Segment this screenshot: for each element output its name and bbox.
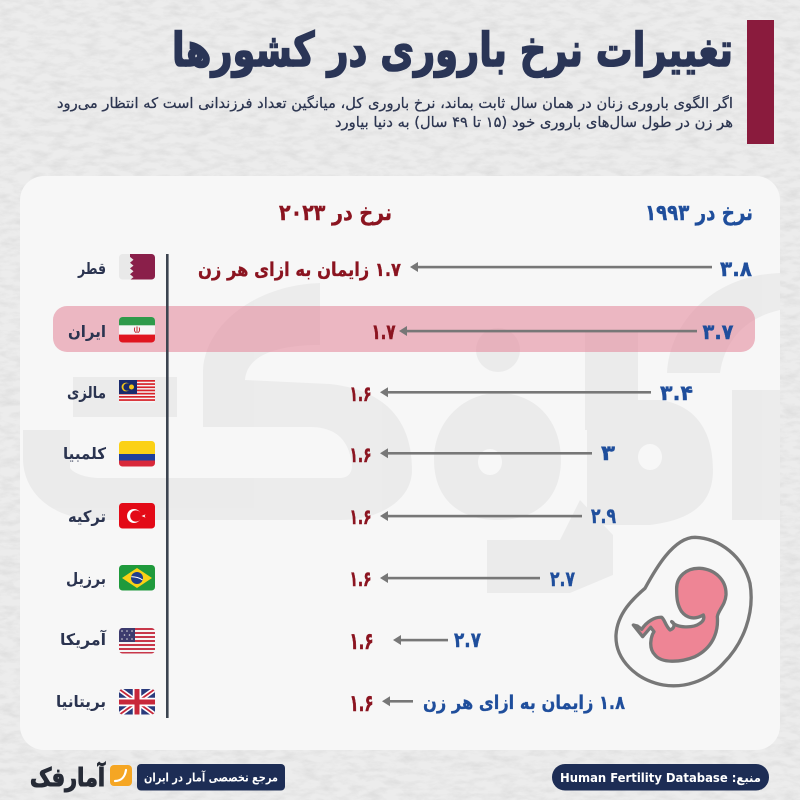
row: USA	[60, 628, 481, 655]
2023 value: ۱.۶	[350, 505, 372, 529]
title accent bar	[747, 20, 774, 144]
flag: Turkey	[119, 503, 155, 529]
2023 value: ۱.۶	[350, 382, 372, 406]
country name: کلمبیا	[63, 444, 107, 463]
source pill: منبع: Human Fertility Database	[560, 770, 761, 785]
country name: ترکیه	[68, 507, 106, 526]
row: Brazil	[66, 565, 575, 591]
flag: Malaysia	[119, 380, 155, 402]
arrow	[393, 635, 448, 645]
icon: fetus in womb	[616, 537, 751, 686]
1993 value: ۱.۸ زایمان به ازای هر زن	[423, 692, 625, 714]
highlight band: Iran	[53, 306, 755, 352]
2023 value: ۱.۶	[350, 567, 372, 591]
arrow	[380, 448, 592, 458]
flag: Brazil	[119, 565, 155, 591]
country name: مالزی	[67, 383, 106, 402]
arrow	[410, 262, 712, 272]
1993 value: ۳	[601, 441, 615, 465]
vertical axis line	[166, 254, 169, 718]
country name: قطر	[77, 259, 106, 278]
2023 value: ۱.۶	[350, 443, 372, 467]
arrow	[380, 511, 582, 521]
column heading: rate in 2023: نرخ در ۲۰۲۳	[279, 201, 392, 226]
flag: USA	[119, 628, 155, 654]
row: Colombia	[63, 441, 615, 467]
1993 value: ۲.۷	[454, 628, 481, 652]
arrow	[382, 696, 413, 706]
2023 value: ۱.۶	[350, 629, 374, 655]
intro text: اگر الگوی باروری زنان در همان سال ثابت بماند، نرخ باروری کل، میانگین تعداد فرزندانی است که انتظار می‌رود	[57, 95, 733, 112]
arrow	[399, 326, 697, 336]
watermark logo	[23, 273, 780, 593]
country name: ایران	[68, 322, 106, 341]
row: Qatar	[77, 254, 752, 281]
flag: Colombia	[119, 441, 155, 467]
2023 value: ۱.۶	[350, 691, 374, 717]
source pill	[552, 764, 769, 790]
brand tagline: مرجع تخصصی آمار در ایران	[144, 770, 278, 784]
column heading: rate in 1993: نرخ در ۱۹۹۳	[645, 201, 753, 226]
row: Iran	[68, 317, 734, 344]
country name: برزیل	[66, 569, 106, 588]
row: Turkey	[68, 503, 616, 529]
1993 value: ۳.۷	[702, 320, 734, 344]
icon: brand logo	[110, 765, 132, 786]
flag: Iran	[119, 317, 155, 343]
flag: Qatar	[119, 254, 155, 280]
brand tagline	[137, 764, 285, 790]
arrow	[380, 387, 651, 397]
row: Malaysia	[67, 380, 693, 406]
intro text: هر زن در طول سال‌های باروری خود (۱۵ تا ۴۹ سال) به دنیا بیاورد	[335, 115, 733, 131]
1993 value: ۲.۷	[550, 567, 575, 591]
1993 value: ۲.۹	[591, 504, 616, 528]
panel: chart card	[20, 176, 780, 750]
arrow	[380, 573, 540, 583]
1993 value: ۳.۴	[660, 381, 693, 405]
flag: UK	[119, 689, 155, 715]
row: Britain	[56, 689, 625, 717]
brand logo wordmark: آمارفک	[30, 762, 106, 792]
2023 value: ۱.۷	[372, 320, 396, 344]
2023 value: ۱.۷ زایمان به ازای هر زن	[198, 259, 401, 281]
country name: آمریکا	[60, 629, 107, 649]
country name: بریتانیا	[56, 692, 106, 711]
1993 value: ۳.۸	[720, 257, 752, 281]
intro text	[57, 95, 733, 131]
